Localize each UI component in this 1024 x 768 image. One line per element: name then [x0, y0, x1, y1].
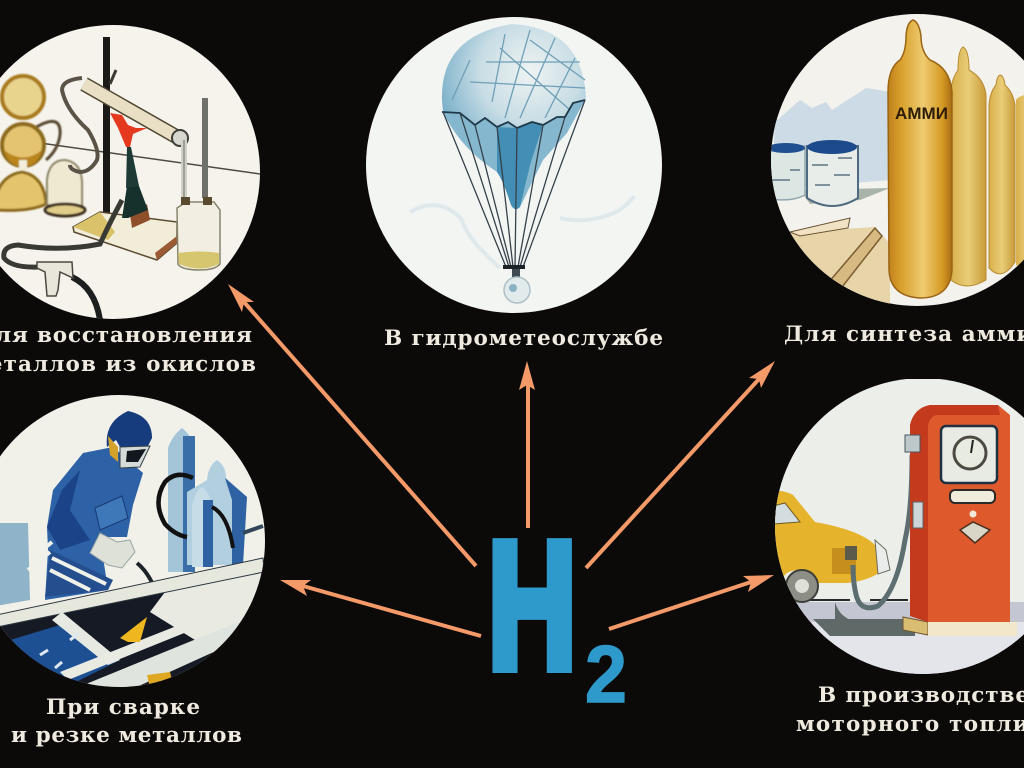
arrow: to ammonia: [586, 361, 775, 568]
icon: stone vats: [764, 140, 858, 206]
caption: welding line 1: При сварке: [46, 695, 200, 720]
panel: weather balloon: [366, 17, 662, 313]
icon: balloon: [442, 24, 586, 303]
icon: gas cylinders: [888, 20, 1024, 298]
icon: welding table: [0, 558, 265, 690]
panel: fuel pump: [765, 379, 1024, 675]
icon: burner with flame: [110, 113, 150, 228]
icon: red pump: [903, 405, 1017, 636]
icon: condenser tube: [84, 70, 188, 146]
icon: collection bottle: [177, 98, 220, 270]
formula: H2: 2: [585, 628, 627, 720]
arrow: to weather service: [519, 361, 535, 528]
caption: motor fuel line 1: В производстве: [818, 683, 1024, 708]
formula: H2: [488, 505, 627, 720]
icon: base board: [73, 212, 177, 260]
panel: ammonia cylinders: [764, 14, 1024, 306]
caption: welding line 2: и резке металлов: [11, 723, 242, 748]
panel: metal reduction laboratory apparatus: [0, 25, 260, 320]
icon: gas tanks: [158, 428, 263, 572]
icon: fuel hose: [853, 455, 912, 608]
icon: gas cylinders: АММИ: [895, 104, 948, 123]
arrow: to welding: [280, 580, 481, 636]
formula: H2: H: [488, 505, 576, 706]
panel: welder: [0, 395, 265, 690]
arrow: to metal reduction: [228, 284, 476, 566]
icon: yellow car: [765, 490, 890, 602]
caption: weather service: В гидрометеослужбе: [384, 326, 663, 351]
icon: welder figure: [28, 411, 160, 604]
icon: rubber tube to condenser: [62, 78, 98, 172]
icon: rubber hose and valve: [4, 200, 122, 320]
arrow: to motor fuel: [609, 575, 774, 629]
icon: stand: [103, 37, 110, 215]
icon: glass flasks: [0, 76, 85, 216]
